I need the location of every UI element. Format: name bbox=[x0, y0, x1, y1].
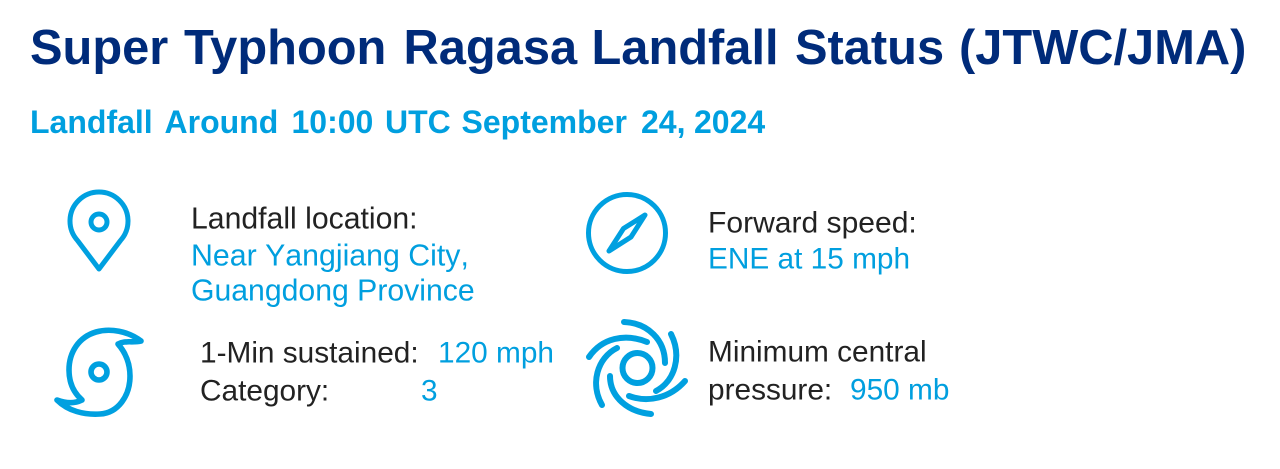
text block: sustained winds and category: 120 mph bbox=[438, 336, 554, 370]
text block: sustained winds and category: Category: bbox=[200, 374, 329, 408]
icon: cyclone symbol bbox=[57, 330, 141, 414]
text block: minimum central pressure: pressure: bbox=[708, 374, 832, 406]
text block: landfall location: Landfall location: bbox=[191, 202, 418, 236]
title: Typhoon bbox=[184, 21, 386, 75]
text block: forward speed: Forward speed: bbox=[708, 206, 917, 240]
subtitle: Landfall bbox=[30, 104, 153, 140]
text block: minimum central pressure: 950 mb bbox=[850, 374, 949, 406]
title: (JTWC/JMA) bbox=[959, 21, 1246, 75]
text block: minimum central pressure: Minimum central bbox=[708, 336, 927, 368]
text block: sustained winds and category bbox=[200, 336, 554, 408]
subtitle: 10:00 bbox=[292, 104, 373, 140]
subtitle: 24, bbox=[641, 104, 685, 140]
text block: forward speed bbox=[708, 206, 917, 276]
title: Super bbox=[30, 21, 168, 75]
text block: sustained winds and category: 1-Min sustained: bbox=[200, 336, 419, 370]
subtitle: September bbox=[462, 104, 627, 140]
title: Landfall bbox=[592, 21, 779, 75]
icon: spiral storm bbox=[589, 322, 685, 414]
text block: landfall location: Guangdong Province bbox=[191, 274, 475, 308]
text block: landfall location: Near Yangjiang City, bbox=[191, 240, 469, 272]
title: Status bbox=[795, 21, 944, 75]
title: Ragasa bbox=[404, 21, 578, 75]
text block: landfall location bbox=[191, 202, 475, 308]
text block: forward speed: ENE at 15 mph bbox=[708, 242, 910, 276]
text block: minimum central pressure bbox=[708, 336, 949, 406]
icon: compass bbox=[588, 194, 666, 272]
subtitle: 2024 bbox=[694, 104, 765, 140]
subtitle: UTC bbox=[385, 104, 451, 140]
icon: location pin bbox=[70, 192, 128, 269]
subtitle: Around bbox=[164, 104, 278, 140]
text block: sustained winds and category: 3 bbox=[421, 374, 438, 408]
